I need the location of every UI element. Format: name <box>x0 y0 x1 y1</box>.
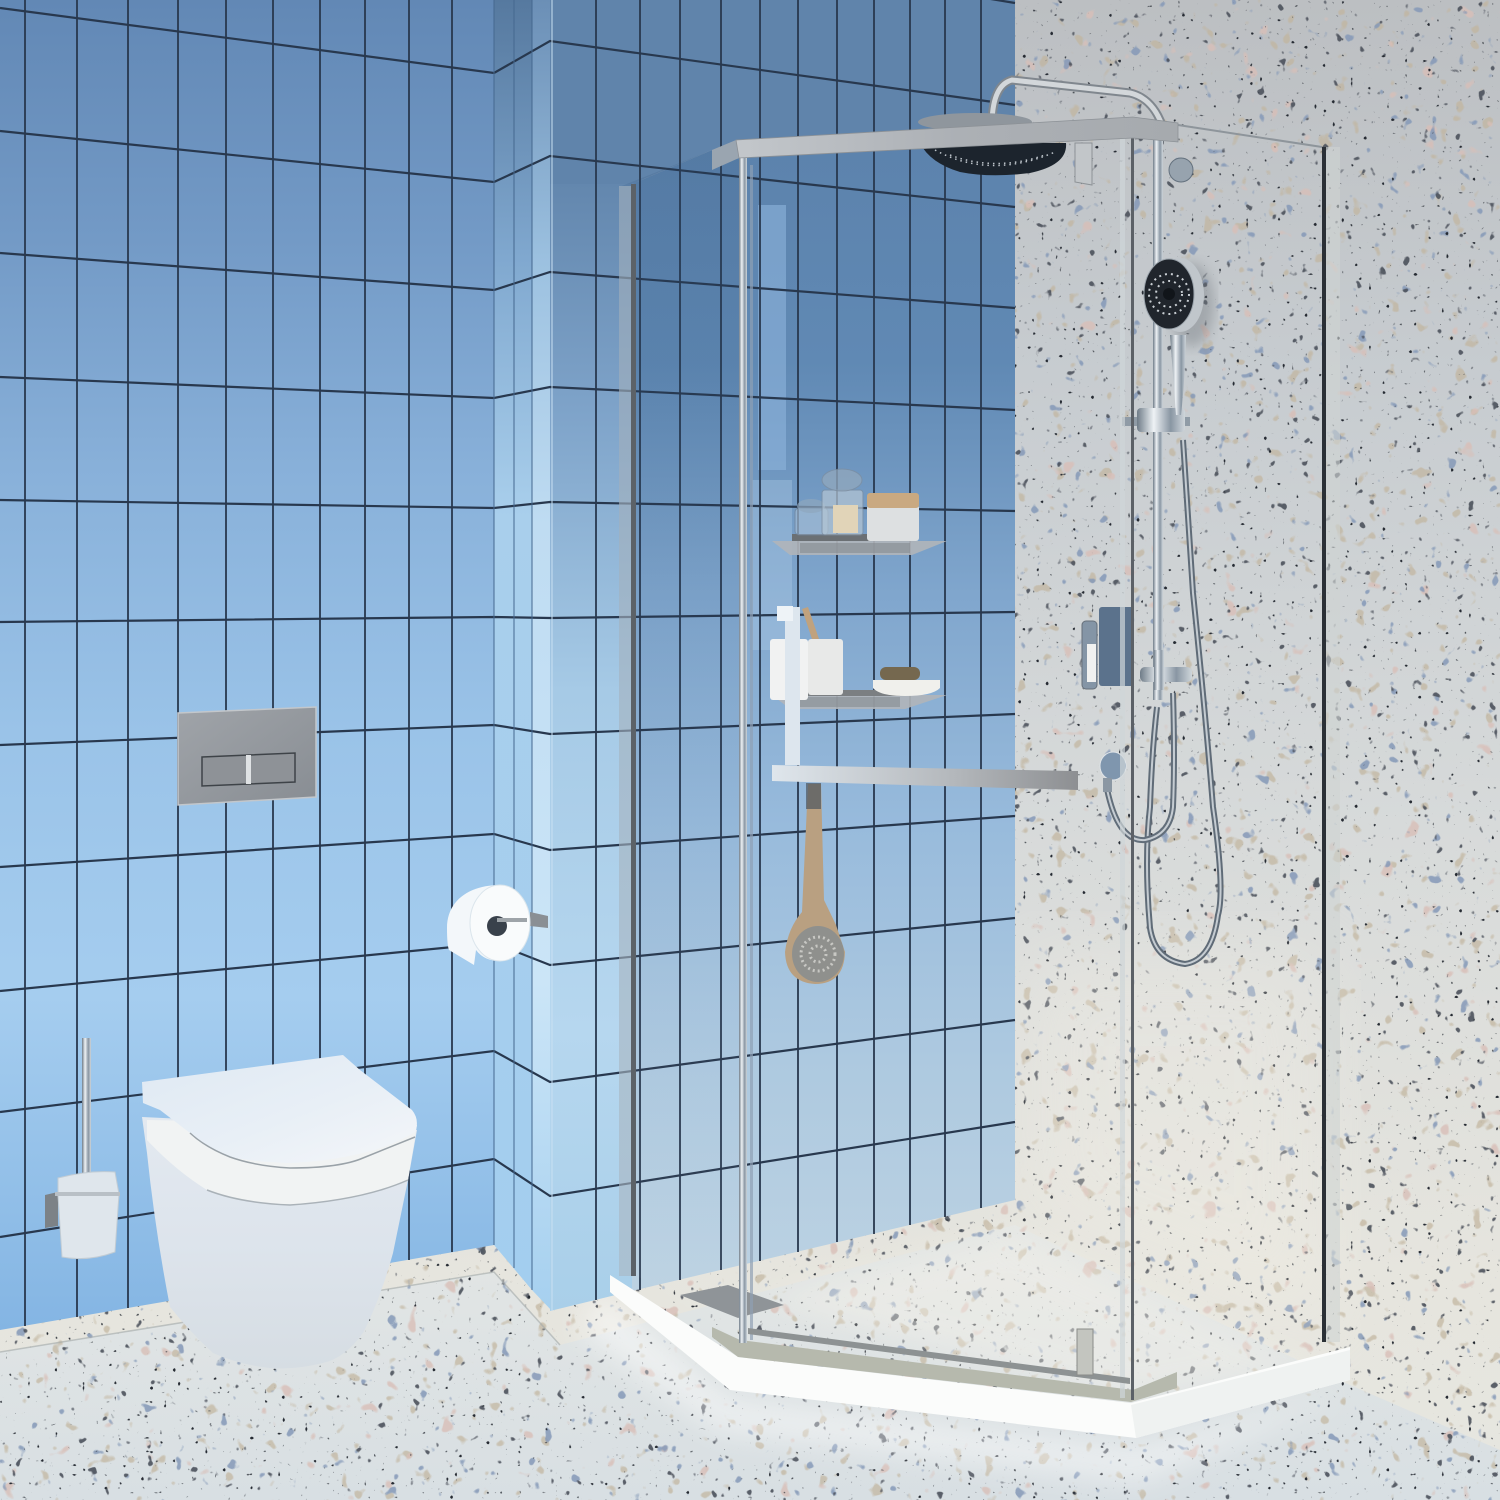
top bar <box>712 117 1178 170</box>
door left post <box>739 158 753 1343</box>
skirting lines <box>0 1272 560 1352</box>
toilet lid <box>142 1055 417 1163</box>
pillar faces <box>494 0 552 1311</box>
shower glass frame <box>619 117 1340 1400</box>
glass tint over shower <box>619 150 740 1340</box>
shower tray <box>610 1275 1350 1438</box>
hose <box>1107 440 1221 964</box>
floor drain <box>680 1285 784 1318</box>
slider <box>1122 408 1190 432</box>
toilet rim band <box>147 1120 417 1205</box>
toothbrush cup and bottle <box>770 607 843 700</box>
blue tile wall: left <box>0 0 1015 1330</box>
riser rail <box>1153 140 1163 700</box>
head underside <box>920 143 1066 175</box>
bottom hinge <box>1077 1329 1093 1375</box>
glass top edge <box>1178 125 1322 147</box>
shelves and toiletries <box>770 469 947 709</box>
soap dish and soap <box>873 667 940 696</box>
flush buttons <box>202 753 295 786</box>
handheld shower head <box>1144 258 1204 415</box>
hose outlet <box>1100 752 1126 792</box>
grout lines <box>0 0 1015 1326</box>
toilet brush holder <box>45 1038 120 1259</box>
diverter <box>1140 650 1192 690</box>
toilet bowl <box>142 1117 417 1368</box>
upright <box>785 607 800 765</box>
towel bar handle <box>772 606 1078 790</box>
head top <box>918 113 1032 131</box>
left profile <box>619 184 636 1276</box>
second shelf <box>772 690 947 709</box>
door bottom rail <box>748 1328 1130 1384</box>
wall mount <box>1169 158 1193 182</box>
right profile <box>1322 147 1340 1342</box>
toilet paper roll and holder <box>447 885 548 965</box>
wall-hung toilet <box>142 1055 417 1368</box>
silver base frame <box>712 1327 1177 1402</box>
door right post <box>1120 138 1134 1400</box>
rain shower head and arm <box>918 80 1162 185</box>
back wall tile <box>550 0 1015 1311</box>
handheld shower shadow <box>1170 263 1214 347</box>
back brush <box>785 783 845 984</box>
shower arm <box>992 80 1162 125</box>
glass jars <box>795 469 863 535</box>
bar <box>772 765 1078 790</box>
top shelf <box>772 534 947 555</box>
ceiling mount <box>1075 143 1092 185</box>
white jar with wooden lid <box>867 493 919 541</box>
valve lever <box>1082 621 1097 689</box>
valve plate <box>1099 607 1134 686</box>
right wall shower system <box>1082 140 1221 964</box>
flush plate <box>178 707 316 805</box>
